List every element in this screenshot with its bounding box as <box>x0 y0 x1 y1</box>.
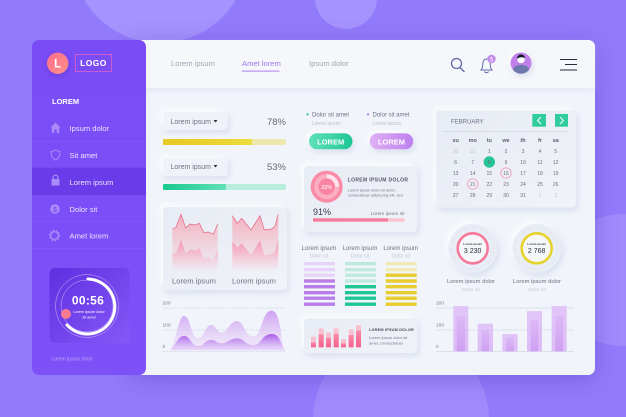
dates: 30 <box>453 149 459 155</box>
dates: 6 <box>454 160 457 166</box>
icon: bell with badge <box>481 55 496 73</box>
progress: yellow <box>163 112 287 145</box>
dates: 24 <box>520 182 526 188</box>
dropdown: Lorem ipsum <box>170 164 211 171</box>
column headings: Lorem ipsum <box>383 246 418 252</box>
chart: purple bars: 200 <box>436 300 444 306</box>
icon: home <box>50 122 60 133</box>
dates: 23 <box>503 182 509 188</box>
logo <box>47 53 112 74</box>
caption: Lorem ipsum sit <box>371 211 405 217</box>
dates: 9 <box>505 160 508 166</box>
gauge: 3 230: Dolor sit <box>462 287 480 293</box>
menu items: Lorem ipsum <box>70 178 113 187</box>
weekday heads: th <box>520 138 526 144</box>
menu items: Dolor sit <box>70 205 98 214</box>
dates: 11 <box>537 160 543 166</box>
chart labels: Lorem ipsum <box>172 276 216 286</box>
dates: 31 <box>470 149 476 155</box>
chart: purple bars: 0 <box>436 344 439 350</box>
button: purple: LOREM <box>378 137 405 146</box>
legend: purple <box>367 112 410 127</box>
header bar <box>140 40 595 88</box>
timer card <box>50 268 130 343</box>
dates: 10 <box>520 160 526 166</box>
legend: green: Lorem ipsum <box>312 121 341 127</box>
gauge: 2 768: 2 768 <box>528 248 546 255</box>
weekday heads <box>452 138 560 144</box>
nav tabs: Lorem ipsum <box>171 59 215 68</box>
icon: shield <box>51 150 60 160</box>
dates: 1 <box>488 149 491 155</box>
icon: avatar <box>510 52 532 74</box>
active row highlight <box>32 168 146 195</box>
dates: 31 <box>520 193 526 199</box>
dates: 18 <box>537 171 543 177</box>
bar track <box>163 139 286 145</box>
icon: search <box>452 58 464 72</box>
column headings: Dolor sit <box>392 254 410 260</box>
icon: menu <box>560 60 577 70</box>
card text: Lorem ipsum dolor sit <box>369 335 407 340</box>
sidebar <box>32 40 146 375</box>
panel: calendar <box>436 110 576 208</box>
dates: 19 <box>553 171 559 177</box>
dates: 1 <box>539 193 542 199</box>
dates: 8 <box>488 160 491 166</box>
dates: 5 <box>554 149 557 155</box>
dates <box>453 149 559 199</box>
dates: 3 <box>522 149 525 155</box>
chart: purple waves: 100 <box>162 322 171 328</box>
column headings: Dolor sit <box>310 254 329 260</box>
weekday heads: we <box>501 138 510 144</box>
chart: right pink area <box>232 214 278 270</box>
sidebar footer: Lorem ipsum dolor <box>52 356 93 362</box>
dates: 30 <box>503 193 509 199</box>
gauge: 2 768: Dolor sit <box>528 287 546 293</box>
card text: consectetuer adipiscing elit, sed <box>348 192 403 198</box>
dates: 7 <box>471 160 474 166</box>
nav tabs <box>171 59 349 72</box>
weekday heads: fr <box>538 138 543 144</box>
percent: 78% <box>267 117 287 128</box>
chart labels: Lorem ipsum <box>232 276 276 286</box>
chart: purple waves: 200 <box>162 300 171 306</box>
dates: 26 <box>553 182 559 188</box>
weekday heads: su <box>452 138 459 144</box>
dates: 25 <box>537 182 543 188</box>
column headings: Dolor sit <box>351 254 370 260</box>
bar fill <box>163 139 252 145</box>
column headings: Lorem ipsum <box>343 246 377 252</box>
purple stripes <box>304 262 335 306</box>
value: 91% <box>313 207 331 217</box>
progress: green <box>163 158 287 190</box>
dates: 12 <box>553 160 559 166</box>
dates: 14 <box>470 171 476 177</box>
timer caption: sit amet <box>82 316 97 320</box>
logo: L <box>54 58 61 70</box>
sidebar background <box>32 40 146 375</box>
weekday heads: sa <box>553 138 560 144</box>
gauge: 2 768: Lorem ipsum <box>527 242 546 246</box>
dropdown: Lorem ipsum <box>170 119 211 126</box>
dates: 22 <box>487 182 492 188</box>
bar fill <box>163 184 226 190</box>
dates: 20 <box>453 182 459 188</box>
legend: green <box>306 112 349 127</box>
dates: 15 <box>487 171 492 177</box>
dates: 27 <box>453 193 459 199</box>
menu items: Sit amet <box>70 151 98 160</box>
legend: purple: Lorem ipsum <box>372 121 401 127</box>
nav tabs: Ipsum dolor <box>309 59 349 68</box>
month: FEBRUARY <box>451 120 484 126</box>
chart: purple bars <box>436 300 574 352</box>
chart: left pink area <box>172 214 218 270</box>
icon: lock <box>52 174 60 186</box>
dates: 2 <box>554 193 557 199</box>
prev button <box>532 114 546 127</box>
button: green: LOREM <box>317 137 344 146</box>
gauge: 2 768 <box>512 224 561 293</box>
bar track <box>163 184 286 190</box>
section heading: LOREM <box>52 97 79 106</box>
logo: LOGO <box>80 58 107 68</box>
chart: purple waves: 0 <box>162 344 166 350</box>
panel: mini bar card <box>304 318 417 353</box>
chart: purple waves <box>162 300 285 352</box>
icon: dollar: $ <box>53 205 58 214</box>
donut 22%: 22% <box>321 185 332 191</box>
dates: 13 <box>453 171 459 177</box>
dates: 29 <box>487 193 492 199</box>
legend and buttons <box>306 112 413 149</box>
timer progress arc <box>67 279 115 334</box>
chart: purple bars: 100 <box>436 322 444 328</box>
icon: gear <box>50 230 60 240</box>
column headings: Lorem ipsum <box>302 246 336 252</box>
gauge: 3 230: 3 230 <box>464 248 482 255</box>
menu items: Ipsum dolor <box>70 124 110 133</box>
striped columns <box>302 246 418 306</box>
legend: green: Dolor sit amet <box>312 112 349 118</box>
card title: LOREM IPSUM DOLOR <box>348 178 408 184</box>
mini bars <box>311 325 361 347</box>
green stripes <box>345 262 376 306</box>
caption: Lorem ipsum dolor <box>447 279 495 285</box>
dates: 17 <box>520 171 526 177</box>
card text: amet, consectetuer <box>369 340 404 345</box>
menu items: Amet lorem <box>70 232 108 240</box>
weekday heads: tu <box>487 138 492 144</box>
progress <box>313 218 404 222</box>
dates: 16 <box>503 171 509 177</box>
card title: LOREM IPSUM DOLOR <box>369 328 414 332</box>
gauge: 3 230: Lorem ipsum <box>463 242 482 246</box>
gauge: 3 230 <box>447 224 497 293</box>
panel: ring stat card <box>304 166 417 232</box>
dates: 2 <box>505 149 508 155</box>
next button <box>555 114 568 127</box>
icon: bell with badge: 5 <box>490 58 494 64</box>
caption: Lorem ipsum dolor <box>513 279 561 285</box>
timer caption: Lorem ipsum dolor <box>73 310 105 314</box>
timer marker <box>61 309 71 319</box>
dates: 21 <box>470 182 476 188</box>
percent: 53% <box>267 162 287 173</box>
main panel <box>130 40 595 375</box>
menu items <box>32 124 146 248</box>
timer value: 00:56 <box>72 294 104 308</box>
dates: 4 <box>539 149 542 155</box>
legend: purple: Dolor sit amet <box>372 112 410 118</box>
dates: 28 <box>470 193 476 199</box>
column headings <box>302 246 418 260</box>
header background <box>140 40 595 88</box>
yellow stripes <box>386 262 417 306</box>
weekday heads: mo <box>469 138 477 144</box>
card text: Lorem ipsum dolor sit amet, <box>348 188 396 192</box>
nav tabs: Amet lorem <box>242 59 281 68</box>
panel: area charts <box>163 207 287 290</box>
icon: dollar <box>50 204 60 214</box>
chart labels <box>172 276 276 286</box>
highlights <box>468 156 511 189</box>
